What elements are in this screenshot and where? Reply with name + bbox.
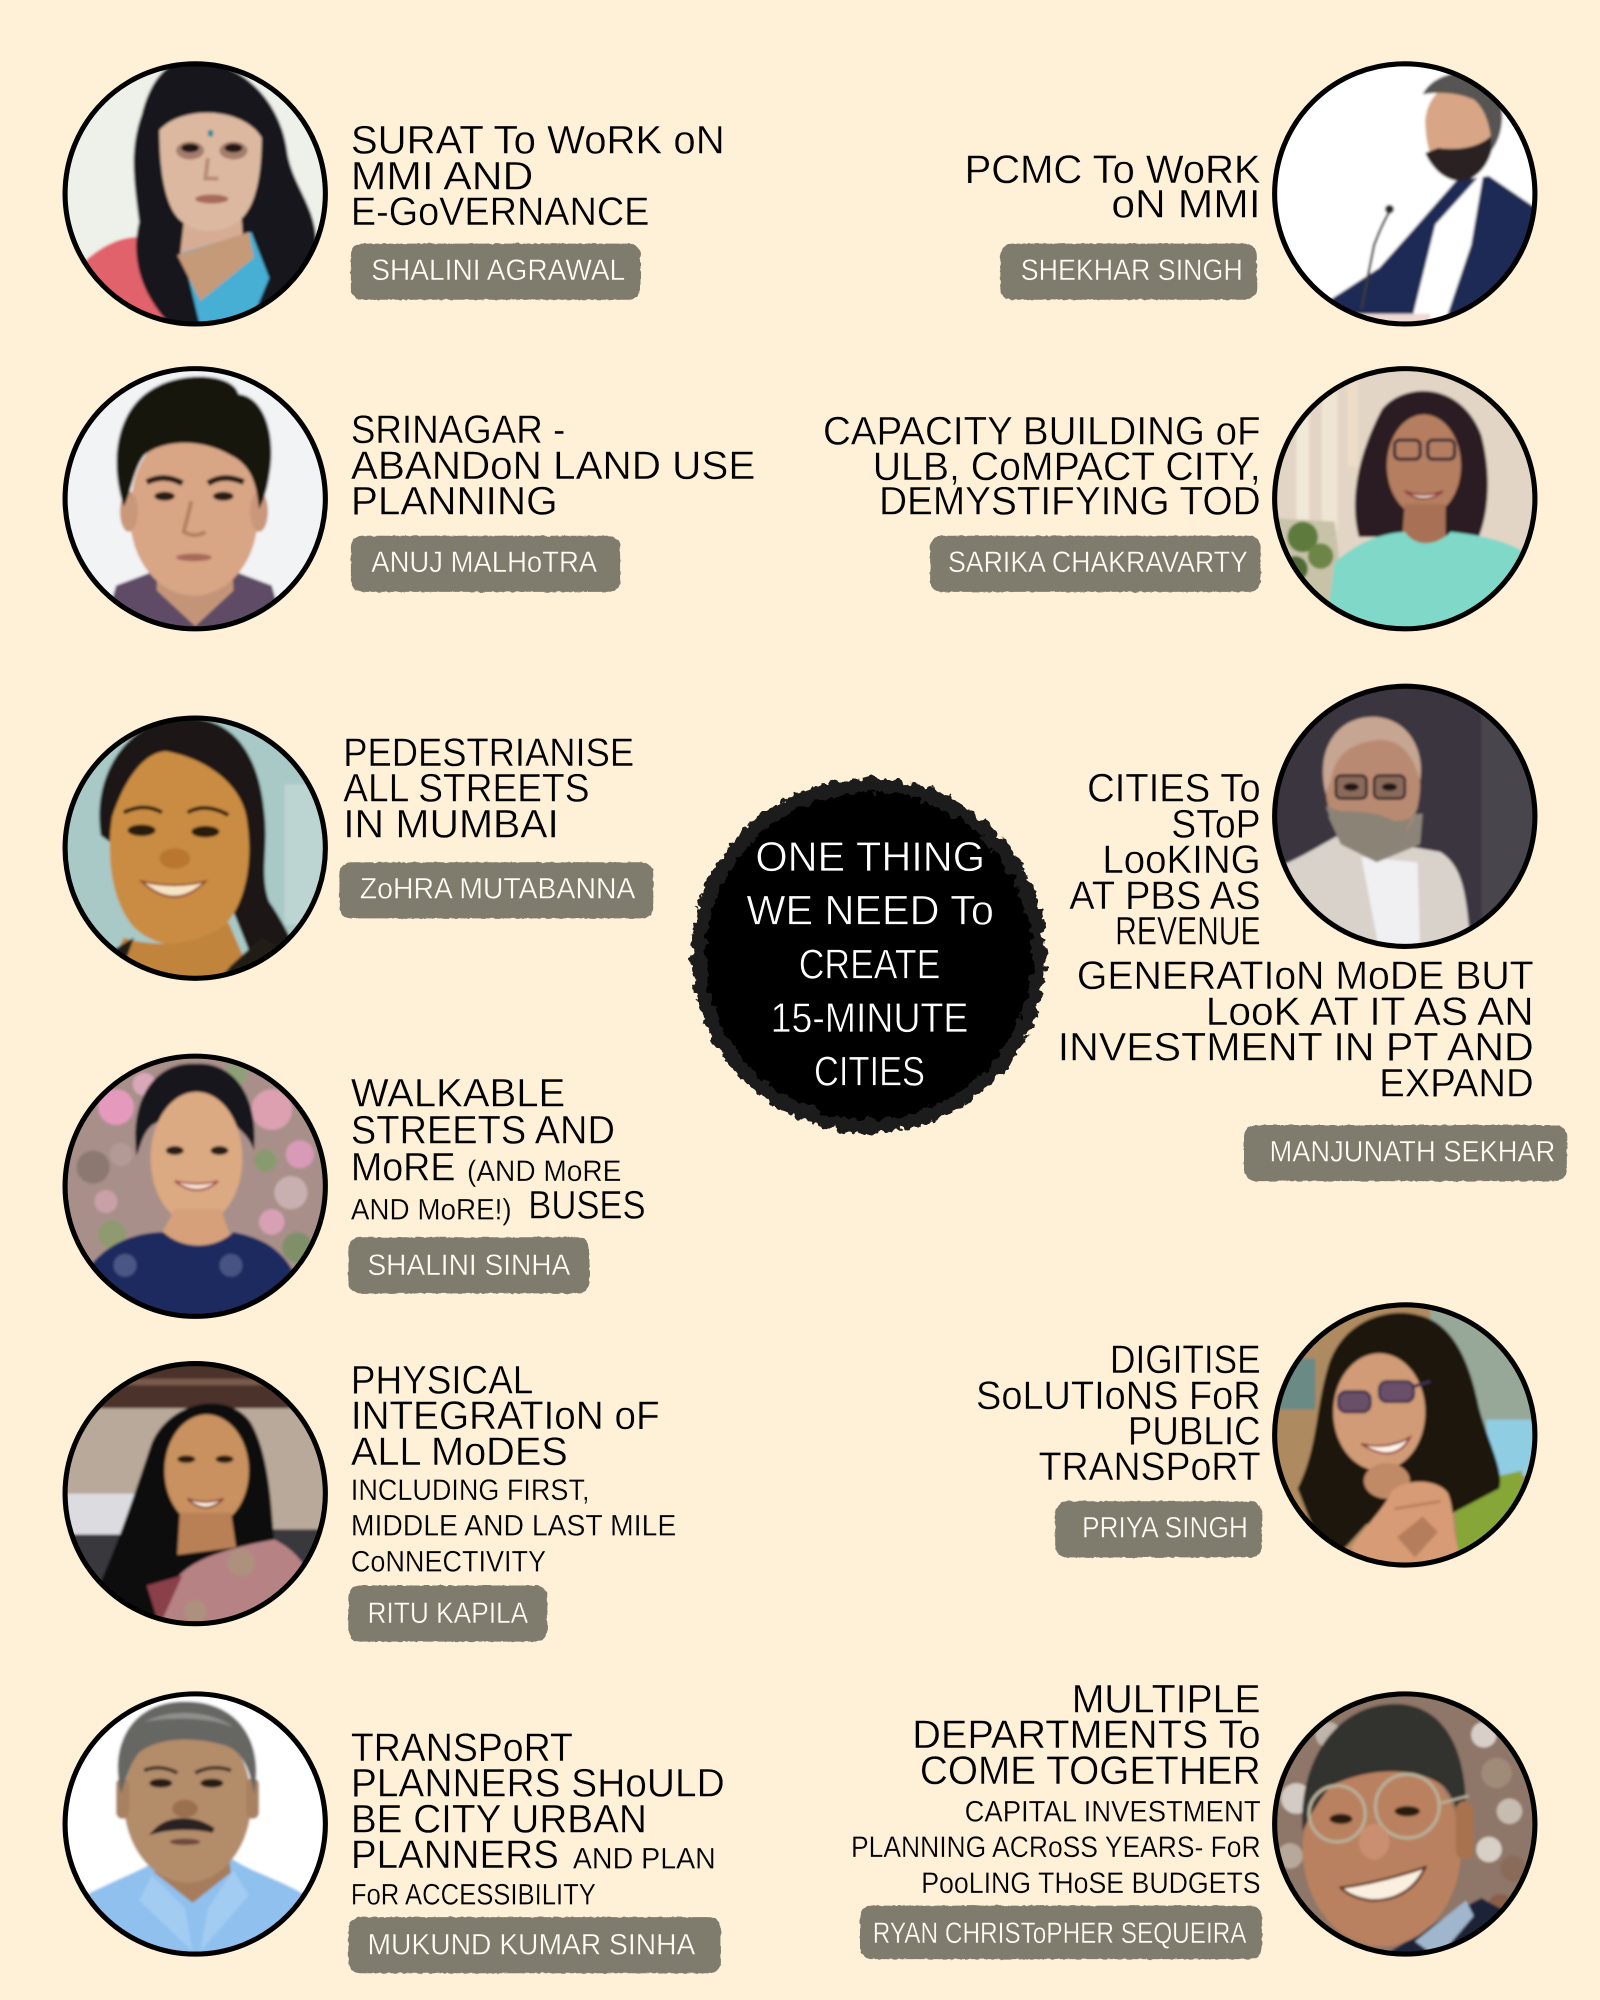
portrait: Shekhar Singh xyxy=(1271,60,1539,334)
name tag: Shekhar Singh: SHEKHAR SINGH xyxy=(1021,254,1243,287)
quote: Ryan Christopher Sequeira: CAPITAL INVESTMENT xyxy=(965,1795,1261,1828)
name tag: Shalini Agrawal xyxy=(351,244,641,300)
name tag: Ryan Christopher Sequeira xyxy=(860,1906,1262,1959)
name tag: Anuj Malhotra xyxy=(351,536,620,592)
quote: Shekhar Singh: oN MMI xyxy=(1111,182,1261,226)
quote: Sarika Chakravarty xyxy=(823,410,1261,524)
quote: Zohra Mutabanna: PEDESTRIANISE xyxy=(343,731,634,775)
name tag: Priya Singh: PRIYA SINGH xyxy=(1082,1512,1248,1545)
quote: Ryan Christopher Sequeira xyxy=(851,1677,1261,1900)
quote: Manjunath Sekhar: AT PBS AS xyxy=(1069,874,1261,918)
centre badge: one thing we need to create 15-minute cities: CREATE xyxy=(799,940,940,987)
quote: Shalini Agrawal xyxy=(351,119,725,234)
quote: Shalini Sinha: BUSES xyxy=(528,1184,646,1228)
quote: Anuj Malhotra xyxy=(351,408,755,524)
quote: Shalini Sinha: STREETS AND xyxy=(351,1109,615,1152)
quote: Mukund Kumar Sinha: PLANNERS xyxy=(351,1833,559,1877)
quote: Priya Singh: SoLUTIoNS FoR xyxy=(976,1374,1261,1418)
panel: Manjunath Sekhar xyxy=(1058,682,1567,1181)
name tag: Anuj Malhotra: ANUJ MALHoTRA xyxy=(371,546,598,579)
quote: Manjunath Sekhar: CITIES To xyxy=(1087,767,1261,811)
quote: Mukund Kumar Sinha: AND PLAN xyxy=(573,1843,716,1876)
quote: Anuj Malhotra: PLANNING xyxy=(351,480,558,524)
quote: Mukund Kumar Sinha: BE CITY URBAN xyxy=(351,1797,647,1841)
quote: Priya Singh: TRANSPoRT xyxy=(1039,1445,1261,1489)
quote: Ritu Kapila: PHYSICAL xyxy=(351,1359,533,1402)
name tag: Sarika Chakravarty xyxy=(930,536,1261,592)
quote: Ryan Christopher Sequeira: PooLING THoSE BUDGETS xyxy=(921,1867,1261,1900)
panel: Ritu Kapila xyxy=(61,1359,676,1642)
quote: Ritu Kapila: ALL MoDES xyxy=(351,1430,568,1474)
quote: Shalini Sinha: (AND MoRE xyxy=(467,1155,621,1188)
name tag: Priya Singh xyxy=(1055,1501,1262,1557)
name tag: Zohra Mutabanna: ZoHRA MUTABANNA xyxy=(360,873,636,906)
name tag: Shalini Sinha xyxy=(348,1237,589,1293)
quote: Manjunath Sekhar: LooK AT IT AS AN xyxy=(1206,990,1534,1034)
quote: Priya Singh: DIGITISE xyxy=(1110,1338,1261,1382)
quote: Zohra Mutabanna: ALL STREETS xyxy=(343,767,589,811)
quote: Shalini Agrawal: MMI AND xyxy=(351,154,533,198)
quote: Ryan Christopher Sequeira: DEPARTMENTS To xyxy=(912,1713,1261,1757)
name tag: Mukund Kumar Sinha: MUKUND KUMAR SINHA xyxy=(367,1929,696,1962)
panel: Anuj Malhotra xyxy=(61,365,755,639)
quote: Manjunath Sekhar: LooKING xyxy=(1102,838,1261,882)
quote: Anuj Malhotra: SRINAGAR - xyxy=(351,408,565,452)
name tag: Shalini Agrawal: SHALINI AGRAWAL xyxy=(371,254,625,287)
quote: Ritu Kapila: INCLUDING FIRST, xyxy=(351,1474,589,1507)
quote: Ritu Kapila: MIDDLE AND LAST MILE xyxy=(351,1510,676,1543)
quote: Manjunath Sekhar xyxy=(1058,767,1534,1105)
quote: Mukund Kumar Sinha: PLANNERS SHoULD xyxy=(351,1762,725,1806)
quote: Shalini Sinha: AND MoRE!) xyxy=(351,1193,512,1226)
name tag: Mukund Kumar Sinha xyxy=(348,1917,721,1973)
name tag: Shalini Sinha: SHALINI SINHA xyxy=(367,1249,571,1282)
centre badge: one thing we need to create 15-minute cities: WE NEED To xyxy=(746,887,994,934)
name tag: Ritu Kapila: RITU KAPILA xyxy=(367,1597,529,1630)
quote: Sarika Chakravarty: DEMYSTIFYING TOD xyxy=(879,480,1261,524)
quote: Shalini Sinha: WALKABLE xyxy=(351,1072,565,1116)
panel: Zohra Mutabanna xyxy=(61,714,653,982)
quote: Sarika Chakravarty: CAPACITY BUILDING oF xyxy=(823,410,1261,454)
centre badge: one thing we need to create 15-minute cities: ONE THING xyxy=(755,833,985,880)
panel: Priya Singh xyxy=(976,1301,1539,1569)
centre badge: one thing we need to create 15-minute cities: 15-MINUTE xyxy=(771,994,968,1041)
quote: Shalini Agrawal: E-GoVERNANCE xyxy=(351,190,649,234)
portrait: Zohra Mutabanna xyxy=(61,714,329,982)
portrait: Anuj Malhotra xyxy=(61,365,329,639)
portrait: Ryan Christopher Sequeira xyxy=(1271,1690,1539,1958)
quote: Shalini Sinha: MoRE xyxy=(351,1145,456,1189)
name tag: Zohra Mutabanna xyxy=(339,862,653,918)
portrait: Manjunath Sekhar xyxy=(1271,682,1539,950)
quote: Ritu Kapila: INTEGRATIoN oF xyxy=(351,1394,660,1438)
name tag: Ryan Christopher Sequeira: RYAN CHRISToPHER SEQUEIRA xyxy=(873,1917,1247,1950)
portrait: Mukund Kumar Sinha xyxy=(61,1690,329,1964)
panel: Shalini Sinha xyxy=(61,1052,646,1327)
quote: Manjunath Sekhar: INVESTMENT IN PT AND xyxy=(1058,1026,1534,1070)
name tag: Sarika Chakravarty: SARIKA CHAKRAVARTY xyxy=(948,546,1248,579)
quote: Shekhar Singh xyxy=(965,148,1261,226)
quote: Zohra Mutabanna xyxy=(343,731,634,846)
name tag: Ritu Kapila xyxy=(348,1585,547,1642)
quote: Mukund Kumar Sinha xyxy=(351,1726,725,1911)
quote: Shalini Agrawal: SURAT To WoRK oN xyxy=(351,119,725,163)
quote: Manjunath Sekhar: REVENUE xyxy=(1115,910,1261,954)
quote: Ritu Kapila: CoNNECTIVITY xyxy=(351,1545,546,1578)
quote: Ryan Christopher Sequeira: PLANNING ACRoSS YEARS- FoR xyxy=(851,1831,1261,1864)
quote: Shekhar Singh: PCMC To WoRK xyxy=(965,148,1261,192)
panel: Ryan Christopher Sequeira xyxy=(851,1677,1539,1959)
quote: Priya Singh: PUBLIC xyxy=(1128,1410,1261,1454)
name tag: Shekhar Singh xyxy=(1000,244,1257,300)
quote: Zohra Mutabanna: IN MUMBAI xyxy=(343,802,559,846)
panel: Sarika Chakravarty xyxy=(823,365,1539,633)
quote: Ritu Kapila xyxy=(351,1359,676,1578)
quote: Sarika Chakravarty: ULB, CoMPACT CITY, xyxy=(873,445,1261,489)
panel: Shalini Agrawal xyxy=(61,60,725,328)
quote: Mukund Kumar Sinha: TRANSPoRT xyxy=(351,1726,573,1770)
name tag: Manjunath Sekhar: MANJUNATH SEKHAR xyxy=(1270,1135,1555,1168)
quote: Ryan Christopher Sequeira: COME TOGETHER xyxy=(920,1749,1261,1793)
portrait: Shalini Sinha xyxy=(61,1052,329,1327)
quote: Priya Singh xyxy=(976,1338,1261,1489)
portrait: Priya Singh xyxy=(1271,1301,1539,1569)
panel: Shekhar Singh xyxy=(965,60,1539,334)
portrait: Sarika Chakravarty xyxy=(1271,365,1539,633)
centre badge: one thing we need to create 15-minute cities xyxy=(692,778,1046,1133)
quote: Anuj Malhotra: ABANDoN LAND USE xyxy=(351,444,755,488)
quote: Shalini Sinha xyxy=(351,1072,646,1228)
quote: Manjunath Sekhar: SToP xyxy=(1171,802,1261,846)
quote: Ryan Christopher Sequeira: MULTIPLE xyxy=(1072,1677,1261,1721)
name tag: Manjunath Sekhar xyxy=(1244,1125,1567,1181)
portrait: Ritu Kapila xyxy=(61,1360,329,1628)
quote: Mukund Kumar Sinha: FoR ACCESSIBILITY xyxy=(351,1878,596,1911)
portrait: Shalini Agrawal xyxy=(61,60,329,328)
centre badge: one thing we need to create 15-minute cities: CITIES xyxy=(814,1047,925,1094)
quote: Manjunath Sekhar: GENERATIoN MoDE BUT xyxy=(1077,954,1534,998)
quote: Manjunath Sekhar: EXPAND xyxy=(1379,1061,1534,1105)
panel: Mukund Kumar Sinha xyxy=(61,1690,725,1973)
